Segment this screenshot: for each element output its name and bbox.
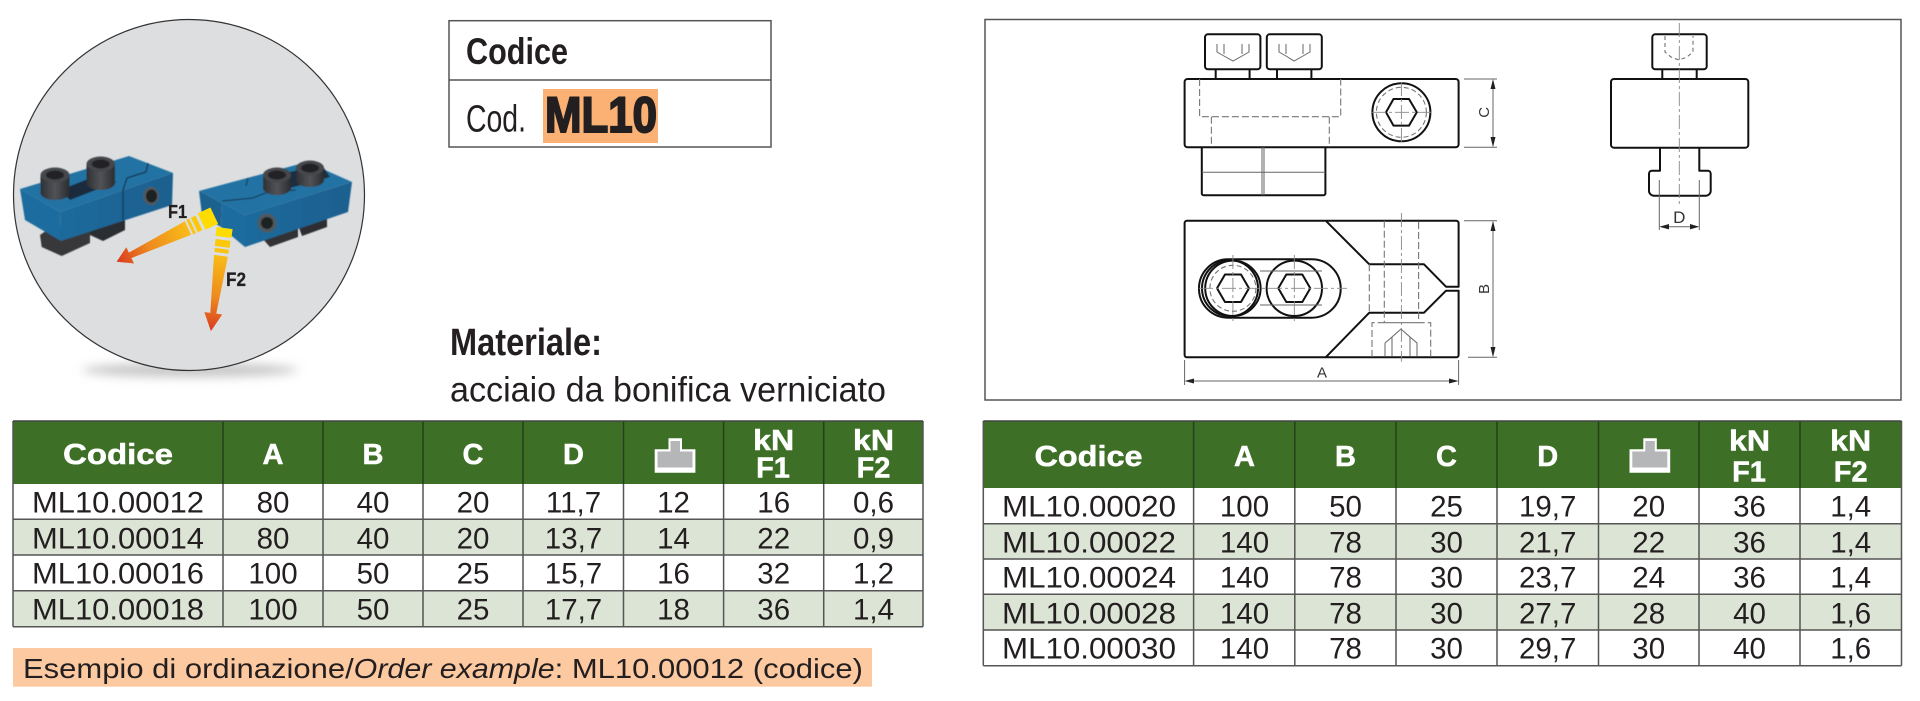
row ML10.00022: 78 [1329,526,1362,559]
row ML10.00012: 80 [257,487,289,520]
left data table [13,421,923,627]
circle shadow [82,363,298,377]
row ML10.00016: 16 [657,558,690,591]
row ML10.00018: 25 [457,593,489,626]
left table row backgrounds [13,484,923,627]
row ML10.00016: 25 [457,558,489,591]
front view [1185,34,1459,195]
row ML10.00028: ML10.00028 [1002,597,1176,630]
material text [450,322,886,410]
row ML10.00012: 20 [457,487,489,520]
row ML10.00012: 12 [657,487,690,520]
row ML10.00020 [1002,491,1871,524]
right table row backgrounds [983,488,1902,666]
row ML10.00030: 30 [1430,633,1463,666]
right clamp [199,160,352,247]
dimension B: B [1476,284,1493,294]
right table header: A [1234,441,1255,473]
row ML10.00022: 36 [1733,526,1766,559]
T-slot icon [1630,438,1670,473]
left table header: D [563,439,584,471]
row ML10.00024: 1,4 [1830,562,1871,595]
row ML10.00030 [1002,633,1871,666]
row ML10.00018: 36 [757,593,790,626]
code value: ML10 [545,87,657,143]
row ML10.00018: ML10.00018 [32,593,204,626]
side view [1611,23,1748,205]
code highlight [543,89,658,143]
right table header: D [1537,441,1558,473]
left table header: kN [753,425,794,457]
row ML10.00028: 40 [1733,597,1766,630]
row ML10.00016: 32 [757,558,790,591]
right table header: kN [1729,426,1770,458]
row ML10.00022: 22 [1632,526,1665,559]
row ML10.00020: 1,4 [1830,491,1871,524]
row ML10.00030: 30 [1632,633,1665,666]
row ML10.00020: 36 [1733,491,1766,524]
T-slot icon [655,438,695,473]
dimension C: C [1476,107,1493,118]
row ML10.00012: 11,7 [546,487,601,520]
row ML10.00020: 100 [1220,491,1269,524]
row ML10.00024: 78 [1329,562,1362,595]
dimension D: D [1673,208,1685,227]
right table header: C [1436,441,1457,473]
row ML10.00014 [32,522,894,555]
right table header: kN [1830,426,1871,458]
row ML10.00028: 1,6 [1830,597,1871,630]
label F2: F2 [226,270,246,291]
dimension A [1185,360,1459,385]
row ML10.00014: 14 [657,522,690,555]
left table header: F1 [756,453,790,485]
order example callout: : ML10.00012 (codice) [555,653,863,684]
row ML10.00028: 28 [1632,597,1665,630]
row ML10.00028: 140 [1220,597,1269,630]
left table header: C [463,439,484,471]
left table header: kN [853,425,894,457]
row ML10.00018: 1,4 [853,593,894,626]
row ML10.00030: ML10.00030 [1002,633,1176,666]
row ML10.00022: 21,7 [1519,526,1576,559]
row ML10.00016: 100 [248,558,298,591]
left table header: F2 [857,453,890,485]
row ML10.00016: 1,2 [853,558,894,591]
left clamp [20,156,173,256]
row ML10.00016: 15,7 [545,558,602,591]
row ML10.00024: ML10.00024 [1002,562,1176,595]
label F1: F1 [168,202,187,222]
row ML10.00020: ML10.00020 [1002,491,1176,524]
order example callout: Order example [354,653,555,684]
row ML10.00020: 25 [1430,491,1463,524]
right table header: F1 [1732,457,1766,489]
row ML10.00024 [1002,562,1871,595]
row ML10.00024: 140 [1220,562,1269,595]
row ML10.00024: 36 [1733,562,1766,595]
row ML10.00030: 78 [1329,633,1362,666]
dimension C [1464,79,1497,147]
row ML10.00028 [1002,597,1871,630]
grey circle [14,20,364,370]
material heading: Materiale: [450,322,602,364]
row ML10.00018: 18 [657,593,690,626]
row ML10.00018 [32,593,894,626]
row ML10.00014: 13,7 [545,522,602,555]
row ML10.00028: 27,7 [1519,597,1576,630]
row ML10.00012: ML10.00012 [32,487,204,520]
row ML10.00030: 1,6 [1830,633,1871,666]
row ML10.00012: 40 [357,487,389,520]
row ML10.00016 [32,558,894,591]
row ML10.00030: 29,7 [1519,633,1576,666]
row ML10.00018: 50 [357,593,389,626]
row ML10.00022: 140 [1220,526,1269,559]
right table header [983,421,1902,489]
arrow F2 [202,227,234,332]
row ML10.00020: 19,7 [1519,491,1576,524]
photo circle with clamps and force arrows [14,20,364,377]
code box heading: Codice [466,31,568,72]
code prefix: Cod. [466,99,526,141]
row ML10.00016: ML10.00016 [32,558,204,591]
order example callout: Esempio di ordinazione/ [23,653,354,684]
row ML10.00018: 100 [248,593,298,626]
row ML10.00028: 78 [1329,597,1362,630]
row ML10.00014: 80 [257,522,289,555]
row ML10.00024: 30 [1430,562,1463,595]
row ML10.00020: 50 [1329,491,1362,524]
material description: acciaio da bonifica verniciato [450,371,886,410]
row ML10.00022 [1002,526,1871,559]
row ML10.00020: 20 [1632,491,1665,524]
row ML10.00024: 23,7 [1519,562,1576,595]
row ML10.00016: 50 [357,558,389,591]
left table header: Codice [63,439,173,471]
row ML10.00014: 40 [357,522,389,555]
row ML10.00014: 20 [457,522,489,555]
right table header: B [1335,441,1356,473]
code box [449,21,771,147]
row ML10.00012: 16 [757,487,790,520]
row ML10.00022: 30 [1430,526,1463,559]
right table header: Codice [1034,441,1142,473]
row ML10.00012: 0,6 [853,487,894,520]
technical drawing panel [985,20,1901,400]
row ML10.00014: ML10.00014 [32,522,204,555]
row ML10.00030: 40 [1733,633,1766,666]
row ML10.00022: ML10.00022 [1002,526,1176,559]
row ML10.00012 [32,487,894,520]
row ML10.00024: 24 [1632,562,1665,595]
right data table [983,421,1902,666]
row ML10.00028: 30 [1430,597,1463,630]
order example callout [13,648,872,687]
left table header: A [263,439,284,471]
plan view [1185,213,1459,362]
row ML10.00014: 22 [757,522,790,555]
dimension B [1464,221,1497,357]
right table header: F2 [1834,457,1868,489]
dimension A: A [1317,365,1327,382]
row ML10.00014: 0,9 [853,522,894,555]
left table header [13,421,923,485]
row ML10.00030: 140 [1220,633,1269,666]
row ML10.00018: 17,7 [545,593,602,626]
left table header: B [363,439,383,471]
dimension D [1659,180,1699,230]
arrow F1 [113,207,218,270]
row ML10.00022: 1,4 [1830,526,1871,559]
